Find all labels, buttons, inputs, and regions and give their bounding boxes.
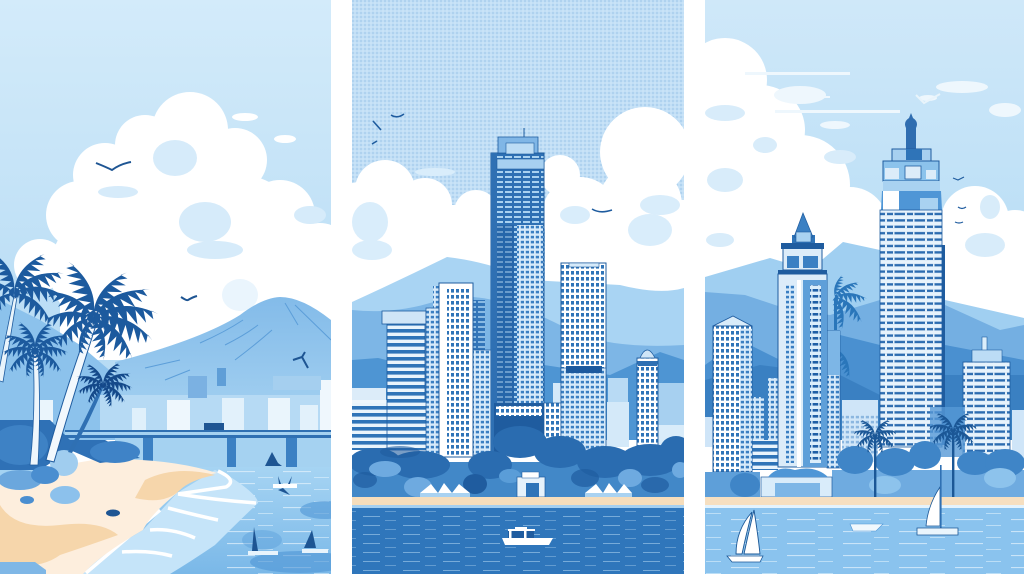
- sand darker patches: [0, 471, 215, 566]
- volcano: [115, 297, 331, 395]
- water: [705, 505, 1024, 574]
- sand: [0, 459, 217, 574]
- birds: [96, 162, 308, 368]
- entrance kiosk: [517, 472, 545, 497]
- mountain ridge light: [352, 257, 684, 346]
- clouds right: [923, 186, 1024, 320]
- clouds: [352, 107, 684, 300]
- water: [352, 505, 684, 574]
- mountain ridge light: [705, 242, 1024, 420]
- mountain ridge mid: [705, 292, 1024, 430]
- narrow building: [827, 331, 840, 468]
- rocks: [0, 450, 120, 516]
- tower low-left block: [352, 388, 387, 450]
- distant city: [37, 368, 331, 431]
- small boat: [850, 524, 883, 531]
- low building entry: [705, 407, 965, 497]
- small building between: [544, 402, 560, 438]
- palm far left: [0, 248, 66, 382]
- clouds: [14, 92, 352, 360]
- cloud shading and wisps: [705, 105, 1005, 257]
- bridge: [65, 423, 331, 467]
- palms: [0, 248, 160, 465]
- palm small: [68, 359, 133, 453]
- palm large: [43, 258, 160, 462]
- white tower: [439, 283, 473, 457]
- sailboat right: [917, 465, 958, 535]
- pavilions: [420, 483, 632, 497]
- promenade: [705, 497, 1024, 505]
- right tower: [561, 263, 606, 457]
- sea shadows: [242, 501, 331, 573]
- tree line: [349, 426, 692, 498]
- ferry boat: [502, 527, 553, 545]
- tower behind white tower: [426, 286, 491, 456]
- right tower: [963, 337, 1010, 455]
- distant buildings right: [553, 378, 684, 447]
- sky: [705, 0, 1024, 320]
- panel: beach with palms and volcano: [0, 0, 352, 574]
- birds: [372, 114, 612, 212]
- large tower: [880, 113, 945, 447]
- central tower: [491, 128, 544, 453]
- panel: downtown skyline with dark water: [332, 0, 692, 574]
- tower left stripes: [382, 311, 426, 450]
- cloud shading: [98, 140, 326, 311]
- palm left middle: [1, 319, 69, 465]
- left hill: [0, 300, 115, 440]
- sailboat left: [727, 510, 763, 562]
- corner water: [0, 562, 46, 574]
- boats: [248, 452, 328, 555]
- mountain lines: [145, 303, 331, 380]
- dark palms: [852, 409, 979, 497]
- mountain ridge dark: [705, 335, 1024, 440]
- left tower: [713, 316, 752, 472]
- mid tower: [778, 213, 827, 467]
- panel: harbour towers with sailboats: [683, 0, 1024, 574]
- birds: [916, 94, 966, 223]
- cloud shading: [352, 168, 680, 260]
- tree line: [730, 441, 1024, 498]
- sea: [0, 467, 331, 574]
- dotted sky: [352, 0, 684, 300]
- promenade: [352, 497, 684, 505]
- small domed tower: [637, 350, 658, 454]
- mountain ridge dark: [352, 352, 684, 440]
- mountain ridge mid: [352, 297, 684, 375]
- sky: [0, 0, 331, 400]
- waterfront pavilion: [761, 469, 832, 497]
- palm behind tower: [827, 274, 867, 379]
- clouds left: [683, 38, 888, 285]
- shoreline bushes: [0, 420, 140, 470]
- low buildings behind: [705, 378, 1024, 470]
- surf: [70, 470, 258, 574]
